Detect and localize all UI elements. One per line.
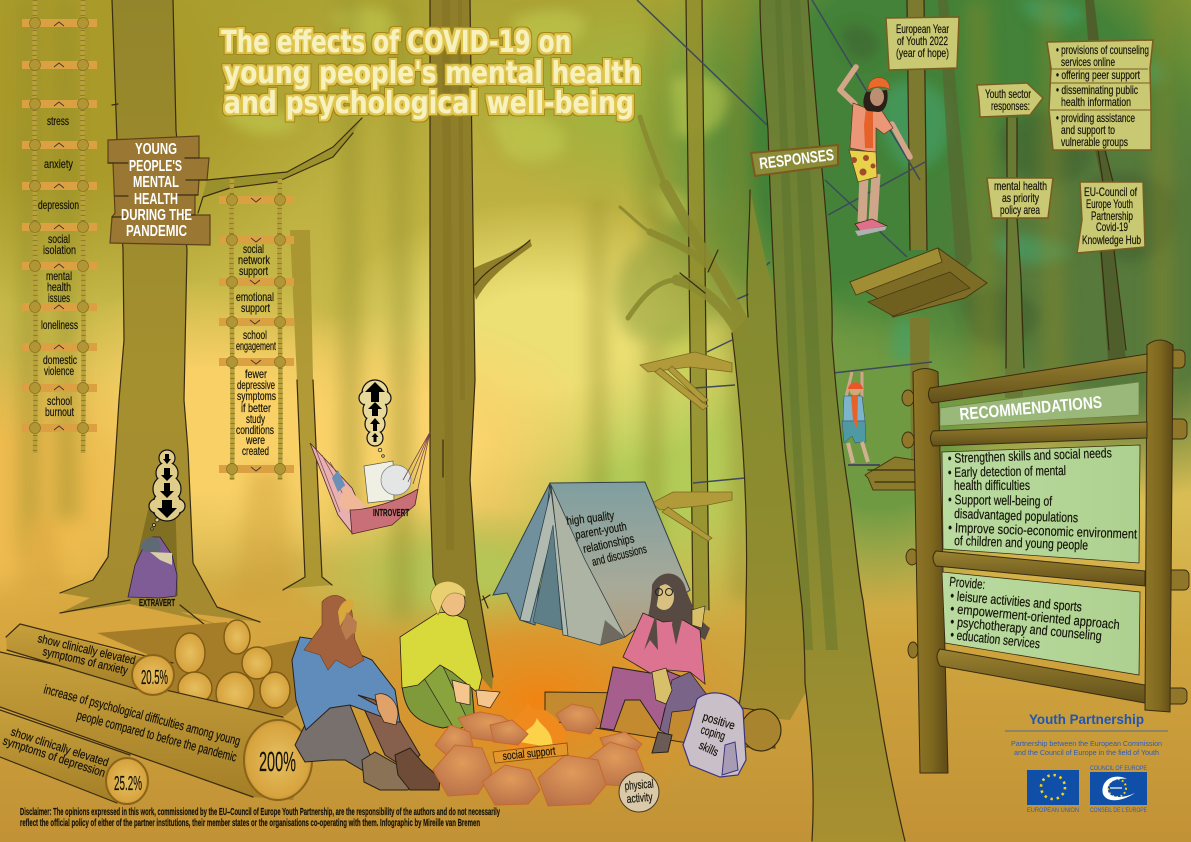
sign: European Year of Youth 2022: European Year [896, 22, 949, 36]
sign: young people's mental health during the pandemic [108, 136, 210, 245]
log label: social support: social support [502, 745, 557, 763]
title: young people's mental health [224, 56, 641, 91]
branch holding the sign [198, 118, 362, 213]
backpack text [697, 709, 737, 759]
panel: strengthen skills list: • Strengthen skills and social needs [948, 445, 1112, 466]
disclaimer: reflect the official policy of either of the partner institutions, their member states or the organisations co-operating with them. Infographic by Mireille van Bremen [20, 818, 480, 829]
sign: mental health as priority policy area [987, 178, 1053, 218]
ladder labels: negative effects: social [48, 232, 70, 246]
text: show clinically elevated symptoms of depression: symptoms of depression [1, 734, 107, 780]
ladder labels: negative effects: violence [44, 364, 74, 378]
campfire [433, 702, 644, 806]
sign: list of youth sector responses [1047, 40, 1153, 150]
sign: EU-Council of Europe Youth Partnership Covid-19 Knowledge Hub: EU-Council of [1084, 185, 1137, 199]
ladder labels: protective factors: were [245, 433, 265, 447]
panel: recommendations heading [940, 382, 1139, 426]
sign: European Year of Youth 2022: of Youth 2022 [897, 34, 948, 48]
trees: far right background trunks [938, 0, 1126, 398]
panel: recommendations heading: RECOMMENDATIONS [959, 393, 1103, 424]
log seat behind campfire [545, 692, 781, 751]
log: 25.2 percent depression: 25.2% [114, 773, 142, 795]
ladder labels: protective factors: school [243, 328, 267, 342]
text: show clinically elevated symptoms of anxiety: symptoms of anxiety [41, 644, 129, 677]
ladder labels: negative effects: isolation [43, 243, 76, 257]
sign: list of youth sector responses: • providing assistance [1056, 111, 1135, 125]
ladder labels: protective factors: support [241, 301, 270, 315]
sign: list of youth sector responses: vulnerable groups [1061, 135, 1128, 149]
sign: young people's mental health during the pandemic: PANDEMIC [126, 223, 187, 240]
upper platform [850, 248, 987, 317]
title [221, 25, 641, 121]
sign: responses: RESPONSES [758, 147, 835, 173]
signpost: recommendations board [902, 340, 1189, 773]
sign: European Year of Youth 2022 [886, 17, 959, 70]
sign: youth sector responses [977, 83, 1043, 117]
ball: physical activity: physical [624, 777, 654, 793]
person: blond young person in yellow shirt [400, 581, 500, 730]
ladder labels: negative effects: burnout [45, 405, 74, 419]
sign: young people's mental health during the pandemic: YOUNG [135, 141, 177, 158]
thought bubble: down arrows [149, 450, 185, 530]
tree: centre trunk [430, 0, 532, 690]
logo: Council of Europe flag: CONSEIL DE L'EUROPE [1090, 808, 1147, 814]
ladder labels: protective factors: fewer [245, 367, 267, 381]
sign: young people's mental health during the pandemic: DURING THE [121, 207, 192, 224]
panel: strengthen skills list: • Support well-being of [948, 492, 1052, 509]
sign: young people's mental health during the pandemic: MENTAL [133, 174, 179, 191]
logo: Youth Partnership: Partnership between the European Commission [1011, 739, 1162, 748]
backpack text: skills [697, 738, 721, 759]
tent text: high quality parent-youth relationships and discussions: relationships [582, 531, 635, 556]
person: woman with glasses [600, 574, 710, 753]
sign: EU-Council of Europe Youth Partnership Covid-19 Knowledge Hub: Knowledge Hub [1082, 233, 1141, 247]
logo: Youth Partnership [1005, 711, 1168, 757]
board rails [928, 354, 1147, 703]
title: The effects of COVID-19 on [221, 25, 571, 60]
panel: strengthen skills list: • Early detection of mental [948, 463, 1066, 480]
panel: strengthen skills list: of children and young people [954, 533, 1088, 553]
thought bubble: up arrows [359, 380, 391, 457]
ladder labels: protective factors: support [239, 264, 268, 278]
ladder labels: protective factors: symptoms [237, 389, 276, 403]
ladder labels: protective factors: engagement [236, 339, 276, 353]
tree: large foreground trunk [760, 0, 905, 842]
log: 20.5 percent anxiety [6, 624, 174, 695]
tent text: high quality parent-youth relationships and discussions: high quality [566, 508, 615, 528]
ladder labels: protective factors: if better [241, 401, 271, 415]
ladder labels: negative effects: loneliness [41, 318, 78, 332]
ball: physical activity [619, 772, 659, 812]
ladder labels: protective factors: network [238, 253, 271, 267]
ropes between trees [637, 0, 932, 483]
ladder: negative effects [22, 0, 97, 453]
log: 200 percent increase [0, 652, 312, 800]
sign: list of youth sector responses: • disseminating public [1056, 83, 1138, 97]
logo: Youth Partnership: Youth Partnership [1029, 711, 1144, 727]
sign: young people's mental health during the pandemic: PEOPLE'S [129, 158, 182, 175]
tree: hammock tree [282, 230, 332, 590]
ladder labels: negative effects: mental [46, 269, 72, 283]
disclaimer [20, 807, 500, 829]
ladder: protective factors [219, 178, 294, 480]
label: extravert: EXTRAVERT [139, 598, 175, 609]
climber: woman on rope [840, 67, 910, 236]
ladder labels: protective factors: emotional [236, 290, 274, 304]
sign: responses [751, 145, 838, 176]
title: and psychological well-being [224, 86, 634, 121]
text: increase of psychological difficulties: increase of psychological difficulties among young [42, 681, 242, 748]
lower treetop platform [652, 492, 732, 541]
text: increase of psychological difficulties: people compared to before the pandemic [75, 707, 239, 765]
tree: thin pole behind platforms [686, 0, 709, 610]
ladder labels: negative effects: school [47, 394, 72, 408]
sign: youth sector responses: responses: [991, 99, 1030, 113]
sign: EU-Council of Europe Youth Partnership Covid-19 Knowledge Hub: Europe Youth [1086, 197, 1133, 211]
panel: provide list: • education services [950, 627, 1041, 651]
tent text: high quality parent-youth relationships and discussions: and discussions [590, 542, 648, 569]
logo: Council of Europe flag: COUNCIL OF EUROPE [1090, 766, 1147, 772]
backpack: positive coping skills [683, 693, 746, 777]
log: 20.5 percent anxiety: 20.5% [141, 667, 168, 689]
label: introvert: INTROVERT [373, 508, 409, 519]
ladder labels: negative effects: domestic [43, 353, 77, 367]
panel: strengthen skills list [942, 445, 1140, 563]
panel: provide list: • psychotherapy and counseling [950, 614, 1102, 644]
ladder labels: negative effects: issues [48, 291, 70, 305]
climber: child on rope [842, 372, 880, 465]
panel: strengthen skills list: disadvantaged populations [954, 506, 1079, 525]
tree: pole behind European Year sign [907, 0, 930, 468]
sign: young people's mental health during the pandemic: HEALTH [134, 191, 178, 208]
sign: list of youth sector responses: and support to [1061, 123, 1115, 137]
sign: youth sector responses: Youth sector [985, 87, 1031, 101]
ladder labels: negative effects: stress [47, 114, 69, 128]
tree: branching trunk behind climbers [620, 117, 806, 720]
text: show clinically elevated symptoms of depression: show clinically elevated [9, 725, 110, 769]
tent [482, 482, 690, 645]
number: 200 percent: 200% [259, 746, 296, 777]
backpack text: coping [699, 722, 727, 743]
disclaimer: Disclaimer: The opinions expressed in this work, commissioned by the EU–Council of Europe Youth Partnership, are the responsibility of the authors and do not necessarily [20, 807, 500, 818]
sign: mental health as priority policy area: policy area [1000, 203, 1040, 217]
tree: large left trunk with roots [60, 0, 260, 625]
ladder labels: negative effects: anxiety [44, 157, 73, 171]
ladder labels: negative effects: health [47, 280, 71, 294]
backpack text: positive [701, 709, 737, 733]
text: show clinically elevated symptoms of anxiety: show clinically elevated [36, 631, 137, 667]
sign: EU-Council of Europe Youth Partnership Covid-19 Knowledge Hub: Covid-19 [1096, 220, 1128, 234]
sign: European Year of Youth 2022: (year of hope) [896, 46, 949, 60]
sign: mental health as priority policy area: mental health [994, 179, 1047, 193]
logo: European Union flag: EUROPEAN UNION [1027, 808, 1079, 814]
panel: provide list: • leisure activities and sports [950, 588, 1083, 615]
panel: strengthen skills list: health difficulties [954, 478, 1030, 493]
ladder labels: protective factors [236, 242, 276, 458]
ball: physical activity: activity [626, 790, 653, 806]
text: increase of psychological difficulties [42, 681, 242, 765]
sign: list of youth sector responses: services online [1061, 55, 1115, 69]
ladder labels: protective factors: study [246, 412, 265, 426]
ladder labels: protective factors: social [243, 242, 264, 256]
ladder labels: negative effects [38, 114, 79, 419]
tent text: high quality parent-youth relationships and discussions [566, 508, 648, 569]
tent text: high quality parent-youth relationships and discussions: parent-youth [574, 519, 628, 542]
figure: extravert sitting under tree [128, 537, 177, 609]
sign: EU-Council of Europe Youth Partnership Covid-19 Knowledge Hub: Partnership [1091, 209, 1133, 223]
logo: Youth Partnership: and the Council of Europe in the field of Youth [1014, 748, 1159, 757]
log: 25.2 percent depression [0, 710, 148, 804]
sign: list of youth sector responses: • provisions of counseling [1056, 43, 1149, 57]
ladder labels: protective factors: conditions [236, 423, 274, 437]
sign: mental health as priority policy area: as priority [1002, 191, 1039, 205]
sign: EU-Council of Europe Youth Partnership Covid-19 Knowledge Hub [1077, 182, 1145, 253]
hammock with reader [310, 432, 430, 534]
ladder labels: protective factors: depressive [237, 378, 275, 392]
person: long-haired young person [292, 595, 440, 790]
background log pile [97, 620, 298, 716]
panel: provide list: Provide: [949, 574, 986, 592]
panel: strengthen skills list: • Improve socio-economic environment [948, 520, 1138, 542]
ladder labels: negative effects: depression [38, 198, 79, 212]
lower right platform [865, 457, 915, 490]
sign: list of youth sector responses: • offering peer support [1056, 68, 1140, 82]
panel: provide list [942, 572, 1140, 675]
sign: list of youth sector responses: health information [1061, 95, 1131, 109]
panel: provide list: • empowerment-oriented approach [950, 601, 1120, 632]
logo: Council of Europe flag [1090, 766, 1147, 814]
ladder labels: protective factors: created [242, 444, 269, 458]
board pegs [902, 350, 1189, 704]
logo: European Union flag [1027, 770, 1079, 814]
treetop platform [640, 352, 732, 410]
